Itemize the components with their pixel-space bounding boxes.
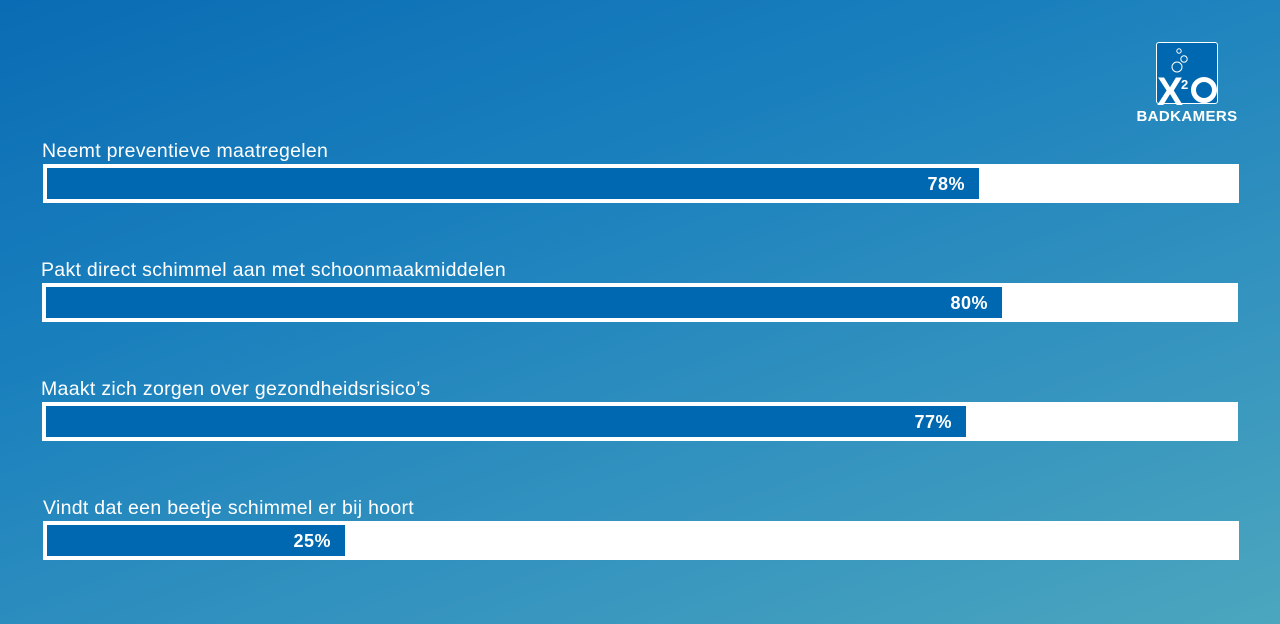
- logo mark: [1156, 42, 1218, 104]
- logo: [1136, 42, 1238, 125]
- label 4: Vindt dat een beetje schimmel er bij hoort: [43, 497, 414, 519]
- bar 1: 78%: [927, 174, 965, 194]
- label 3: Maakt zich zorgen over gezondheidsrisico’s: [41, 378, 430, 400]
- label 2: Pakt direct schimmel aan met schoonmaakmiddelen: [41, 259, 506, 281]
- bar 2: 80%: [950, 293, 988, 313]
- bar 2: [42, 283, 1238, 322]
- bar 4: 25%: [293, 531, 331, 551]
- bar 4: [43, 521, 1239, 560]
- bar 1: [43, 164, 1239, 203]
- bar 3: [42, 402, 1238, 441]
- logo mark: 2: [1181, 77, 1188, 92]
- bar 3: 77%: [914, 412, 952, 432]
- label 1: Neemt preventieve maatregelen: [42, 140, 328, 162]
- logo text: BADKAMERS: [1136, 108, 1238, 125]
